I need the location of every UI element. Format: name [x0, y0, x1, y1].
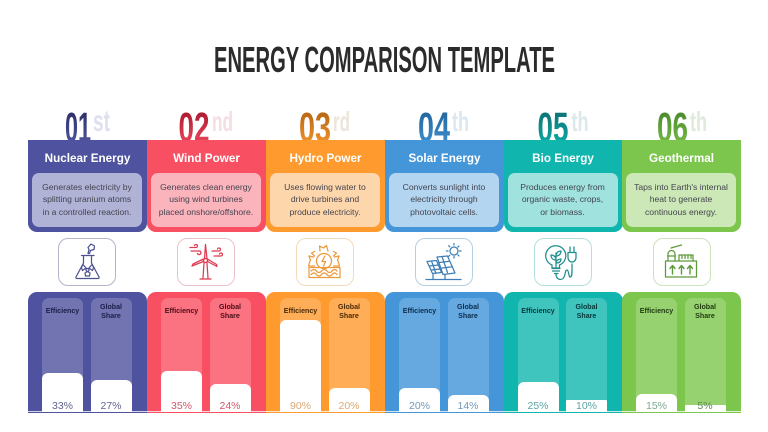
bar: global share 27%: Share — [101, 312, 121, 320]
text: bio description: Produces energy from — [520, 182, 605, 192]
bar: global share 14%: 14% — [457, 400, 478, 412]
bar: efficiency 20%: Efficiency — [403, 307, 436, 315]
icon: bio bulb and plug — [534, 238, 592, 286]
text: nuclear description: splitting uranium atoms — [43, 194, 131, 204]
text: geothermal description: Taps into Earth's internal — [634, 182, 728, 192]
heading: nuclear energy: Nuclear Energy — [45, 152, 130, 165]
panel: bio energy header — [504, 140, 622, 232]
text: solar description: Converts sunlight into — [403, 182, 485, 192]
panel: wind power header — [147, 140, 266, 232]
rank number: 01st: st — [93, 105, 110, 138]
heading: solar energy: Solar Energy — [408, 152, 481, 165]
bar: global share 24% — [210, 298, 250, 412]
bar: efficiency 15%: Efficiency — [640, 307, 673, 315]
bar: global share 27%: Global — [100, 303, 122, 311]
rank number: 04th: th — [452, 106, 469, 137]
bar: efficiency 35%: Efficiency — [165, 307, 198, 315]
rank number: 01st: 01 — [65, 104, 91, 150]
bar: efficiency 25%: 25% — [527, 400, 548, 412]
bar: efficiency 25%: Efficiency — [521, 307, 555, 315]
bar: global share 27% — [90, 298, 132, 412]
text: geothermal description — [626, 173, 736, 227]
bar: global share 10% — [566, 298, 607, 412]
bar: efficiency 35%: 35% — [171, 400, 192, 412]
bar: global share 5%: Global — [694, 303, 716, 311]
text: nuclear description: Generates electricity by — [42, 182, 132, 192]
icon: hydro water wheel — [296, 238, 354, 286]
icon: solar panels — [415, 238, 473, 286]
bar: efficiency 90%: 90% — [290, 400, 311, 412]
text: wind description — [151, 173, 261, 227]
rank number: 03rd: 03 — [299, 104, 331, 150]
panel: nuclear chart — [28, 292, 147, 413]
bar: global share 24%: Share — [220, 312, 240, 320]
text: bio description: organic waste, crops, — [522, 194, 603, 204]
rank number: 03rd: rd — [333, 106, 350, 137]
bar: efficiency 20%: 20% — [409, 400, 430, 412]
text: wind description: using wind turbines — [169, 194, 243, 204]
bar: efficiency 33% — [42, 298, 83, 412]
text: solar description — [389, 173, 499, 227]
bar: global share 10%: Global — [575, 303, 598, 311]
panel: hydro chart — [266, 292, 385, 413]
panel: solar energy header — [385, 140, 504, 232]
icon: nuclear flask — [58, 238, 116, 286]
panel: geothermal header — [622, 140, 741, 232]
bar: global share 14% — [448, 298, 488, 412]
bar: efficiency 90%: Efficiency — [284, 307, 317, 315]
text: hydro description: drive turbines and — [291, 194, 359, 204]
bar: global share 20%: 20% — [338, 400, 360, 412]
text: hydro description: produce electricity. — [289, 207, 360, 217]
bar: global share 20%: Share — [339, 312, 359, 320]
text: nuclear description — [32, 173, 142, 227]
panel: solar chart — [385, 292, 504, 413]
icon: wind turbine — [177, 238, 235, 286]
heading: hydro power: Hydro Power — [289, 152, 362, 165]
bar: global share 14%: Global — [457, 303, 479, 311]
rank number: 02nd: 02 — [178, 104, 210, 150]
rank number: 06th: th — [690, 106, 707, 137]
bar: global share 27%: 27% — [100, 400, 122, 412]
panel: hydro power header — [266, 140, 385, 232]
bar: global share 5%: Share — [695, 312, 715, 320]
bar: global share 10%: 10% — [576, 400, 597, 412]
rank number: 02nd: nd — [212, 106, 233, 137]
bar: global share 24%: 24% — [219, 400, 240, 412]
bar: global share 5% — [684, 298, 726, 412]
panel: bio chart — [504, 292, 622, 413]
bar: efficiency 25% — [518, 298, 558, 412]
bar: global share 24%: Global — [219, 303, 241, 311]
text: geothermal description: continuous energy. — [645, 207, 717, 217]
panel: geothermal chart — [622, 292, 741, 413]
bar: efficiency 20% — [399, 298, 440, 412]
heading: bio energy: Bio Energy — [532, 152, 594, 165]
bar: efficiency 33%: 33% — [52, 400, 73, 412]
bar: global share 5%: 5% — [697, 400, 713, 412]
bar: global share 14%: Share — [458, 312, 478, 320]
bar: efficiency 33%: Efficiency — [46, 307, 79, 315]
bar: efficiency 15% — [636, 298, 677, 412]
text: hydro description: Uses flowing water to — [284, 182, 366, 192]
bar: efficiency 35% — [161, 298, 202, 412]
text: wind description: Generates clean energy — [160, 182, 252, 192]
text: geothermal description: heat to generate — [650, 194, 712, 204]
text: solar description: photovoltaic cells. — [410, 207, 478, 217]
rank number: 05th: 05 — [537, 104, 568, 150]
heading: wind power: Wind Power — [173, 152, 240, 165]
bar: efficiency 90% — [280, 298, 321, 412]
heading: geothermal: Geothermal — [649, 152, 714, 165]
bar: global share 20% — [328, 298, 370, 412]
text: bio description — [508, 173, 618, 227]
icon: geothermal plant — [653, 238, 711, 286]
bar: global share 20%: Global — [338, 303, 360, 311]
bar: global share 10%: Share — [577, 312, 596, 320]
panel: nuclear energy header — [28, 140, 147, 232]
panel: wind chart — [147, 292, 266, 413]
text: hydro description — [270, 173, 380, 227]
rank number: 05th: th — [571, 106, 588, 137]
text: solar description: electricity through — [410, 194, 478, 204]
bar: efficiency 15%: 15% — [646, 400, 667, 412]
text: bio description: or biomass. — [540, 207, 585, 217]
text: wind description: placed onshore/offshore. — [159, 207, 253, 217]
rank number: 04th: 04 — [418, 104, 450, 150]
text: nuclear description: in a controlled reaction. — [43, 207, 131, 217]
rank number: 06th: 06 — [657, 104, 688, 150]
